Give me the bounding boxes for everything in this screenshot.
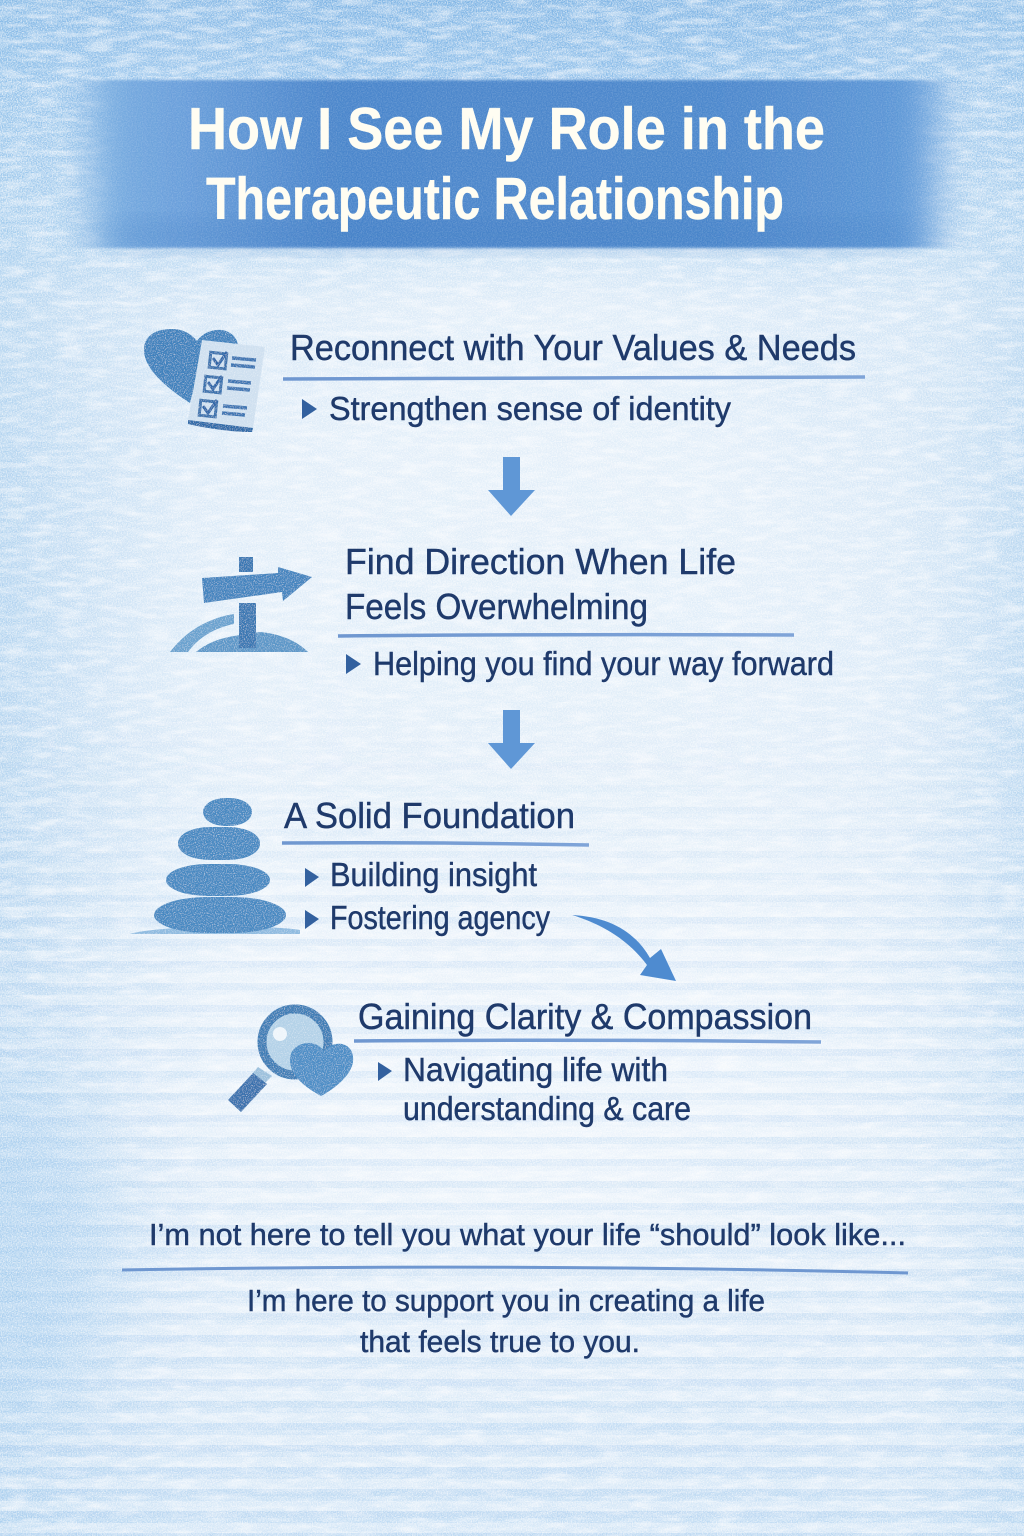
arrow 3: curved — [572, 915, 676, 981]
section 1: values and needs: Strengthen sense of identity — [329, 390, 731, 427]
heading: Gaining Clarity & Compassion — [358, 996, 812, 1037]
section 4: clarity — [228, 996, 821, 1127]
section 2: direction: Helping you find your way forward — [373, 645, 834, 682]
closing statement: that feels true to you. — [360, 1324, 640, 1359]
heading: Find Direction When Life — [345, 541, 736, 582]
title text — [188, 96, 825, 232]
arrow 2 — [488, 710, 535, 769]
bullet — [346, 654, 361, 674]
section 4: clarity: understanding & care — [403, 1090, 691, 1127]
heading: A Solid Foundation — [284, 795, 575, 836]
section 3: foundation — [130, 795, 589, 936]
bullet — [305, 868, 319, 887]
icon: magnifier with heart — [228, 1009, 353, 1112]
closing statement: I’m here to support you in creating a life — [247, 1283, 765, 1318]
closing statement — [122, 1217, 908, 1359]
section 1: values and needs — [144, 327, 865, 432]
bullet — [378, 1062, 392, 1081]
icon: stacked stones — [130, 798, 300, 934]
title text: How I See My Role in the — [188, 96, 825, 162]
bullet — [302, 399, 317, 419]
section 4: clarity: Navigating life with — [403, 1051, 668, 1088]
section 2: direction — [170, 541, 834, 682]
title banner — [0, 76, 1024, 252]
section 3: foundation: Fostering agency — [330, 899, 550, 936]
arrow 1 — [488, 457, 535, 516]
heading: Reconnect with Your Values & Needs — [290, 327, 856, 368]
section 3: foundation: Building insight — [330, 856, 537, 893]
icon: heart with checklist — [144, 329, 265, 432]
closing statement: I’m not here to tell you what your life “should” look like... — [149, 1217, 906, 1252]
icon: signpost — [170, 557, 312, 652]
title text: Therapeutic Relationship — [206, 166, 784, 232]
section 2: direction: Feels Overwhelming — [345, 586, 648, 627]
bullet — [305, 910, 319, 929]
